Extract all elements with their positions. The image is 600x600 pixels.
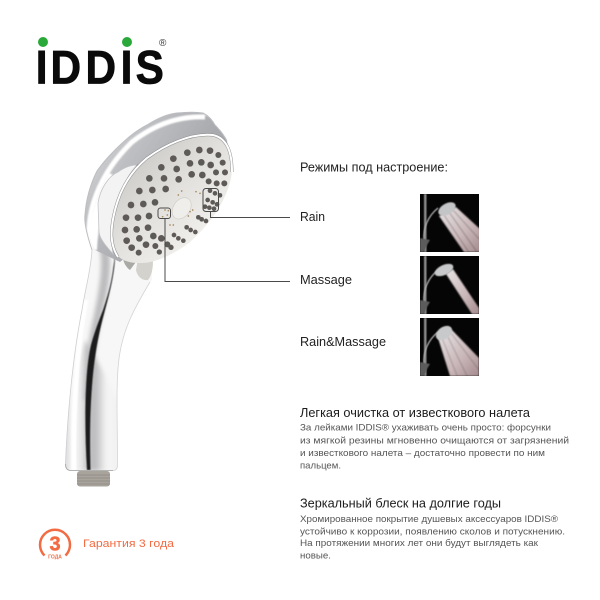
small massage nozzles: [162, 190, 201, 226]
center button: [168, 194, 195, 223]
body: устойчиво к коррозии, появлению сколов и потускнению.: [300, 526, 565, 538]
heading: modes: Режимы под настроение:: [300, 160, 448, 174]
text block: mirror shine: [300, 496, 565, 562]
number 3: 3: [49, 534, 61, 556]
icon: 3 year ring: [40, 530, 70, 556]
logo: IDDIS: [36, 37, 167, 94]
body: и известкового налета – достаточно провести по ним: [300, 448, 545, 459]
body: новые.: [300, 550, 331, 562]
logo green dot left: [38, 37, 48, 47]
trigger tabs: [123, 252, 153, 280]
threaded connector: [77, 471, 110, 486]
registered mark: ®: [159, 38, 167, 49]
logo green dot right: [122, 37, 132, 47]
logo wordmark: IDDIS: [36, 43, 164, 94]
label: Rain: Rain: [300, 209, 325, 224]
body: За лейками IDDIS® ухаживать очень просто: форсунки: [300, 422, 551, 434]
warranty badge: [40, 530, 175, 560]
body: Хромированное покрытие душевых аксессуаров IDDIS®: [300, 514, 558, 525]
dark accent: [134, 158, 148, 172]
heading: Легкая очистка от известкового налета: [300, 406, 530, 420]
body: пальцем.: [300, 460, 341, 472]
body: [300, 514, 565, 562]
shower head product image: [65, 105, 240, 486]
label: years: ГОДА: [48, 554, 62, 560]
heading: Зеркальный блеск на долгие годы: [300, 496, 501, 510]
inner panel: [98, 165, 137, 254]
warranty text: Гарантия 3 года: [83, 538, 175, 550]
face rim: [112, 135, 232, 257]
nozzles: [122, 147, 228, 256]
head chrome back: [84, 112, 228, 262]
photo: massage mode: [420, 256, 479, 314]
spray face: [112, 135, 232, 263]
label: Rain&Massage: Rain&Massage: [300, 334, 386, 349]
callout: Massage: [158, 208, 290, 282]
body: из мягкой резины мгновенно очищаются от загрязнений: [300, 436, 569, 446]
handle: [65, 250, 150, 471]
outer edge: [85, 112, 227, 250]
photo: rain mode: [420, 194, 480, 254]
photo: rain and massage mode: [420, 318, 479, 378]
text block: easy cleaning: [300, 406, 569, 472]
label: Massage: Massage: [300, 272, 352, 287]
body: [300, 422, 569, 472]
body: На протяжении многих лет они будут выглядеть как: [300, 538, 539, 549]
callout: Rain: [203, 188, 290, 218]
